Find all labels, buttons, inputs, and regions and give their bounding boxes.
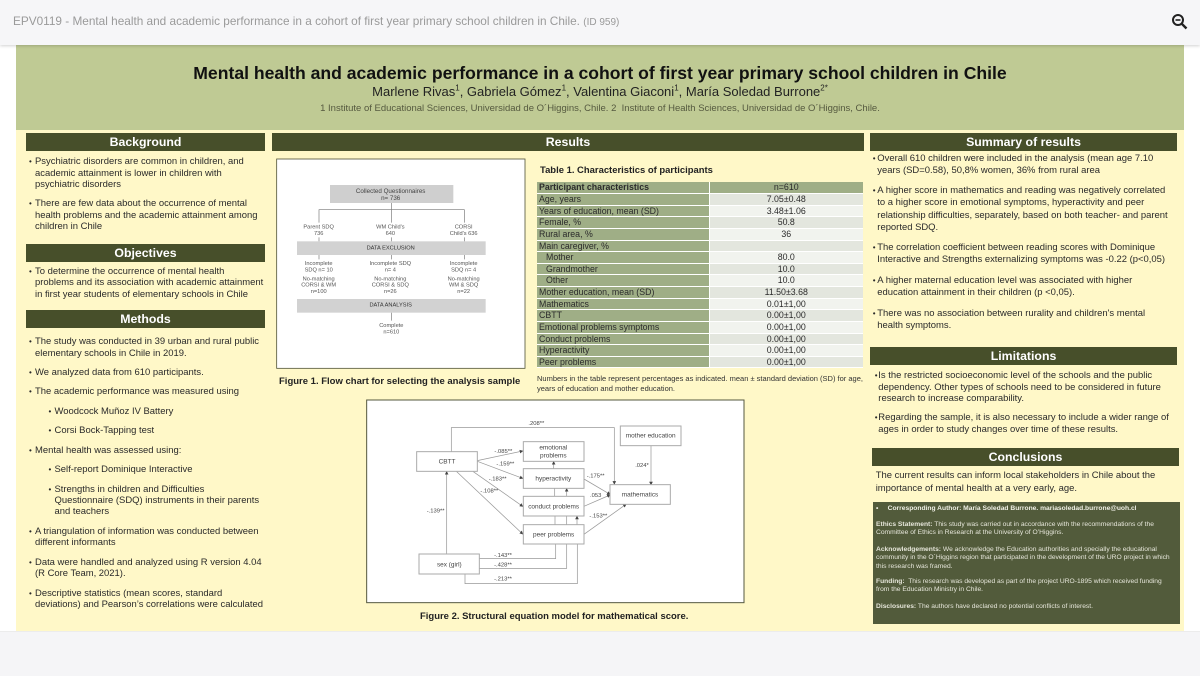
ethics statement: Committee of Ethics in Research at the University of O’Higgins.	[876, 529, 1063, 536]
text: statistics: Descriptive statistics (mean scores, standard	[35, 588, 222, 599]
table 1: participant characteristics: CBTT	[539, 310, 562, 320]
funding	[876, 578, 1162, 593]
figure 2: structural equation model: -.139**	[427, 509, 445, 515]
text: summary 2: reported SDQ.	[877, 222, 938, 233]
figure 2: structural equation model: mother education	[626, 433, 676, 440]
ethics statement	[876, 521, 1154, 536]
figure 1: flow chart: Child's 636	[450, 231, 478, 237]
text: SDQ	[54, 484, 259, 518]
table 1: participant characteristics: 11.50±3.68	[765, 287, 808, 297]
table 1: participant characteristics: n=610	[774, 182, 799, 192]
text: background bullet 1	[35, 156, 244, 191]
table note: years of education and mother education.	[537, 384, 675, 393]
text: objectives: problems and its association with academic attainment	[35, 277, 263, 288]
figure 1: flow chart: No-matching	[448, 276, 480, 282]
figure 1: flow chart: n=610	[383, 329, 399, 335]
text: conclusions: importance of mental health at a very early, age.	[876, 482, 1077, 494]
text: R software: (R Core Team, 2021).	[35, 568, 126, 579]
table 1: participant characteristics: Hyperactivity	[539, 345, 589, 355]
text: limitation 1: dependency. Other types of schools need to be considered in future	[878, 382, 1161, 393]
acknowledgements	[876, 546, 1170, 570]
text: triangulation: different informants	[35, 537, 116, 548]
text: statistics	[35, 588, 263, 610]
funding: from the Education Ministry in Chile.	[876, 586, 983, 593]
table 1: participant characteristics: Main caregiver, %	[539, 241, 609, 251]
heading: background	[26, 133, 265, 151]
text: summary 4: A higher maternal education level was associated with higher	[877, 275, 1132, 286]
figure 1: flow chart: 736	[314, 231, 323, 237]
text: study: The study was conducted in 39 urban and rural public	[35, 336, 259, 347]
funding: Funding: This research was developed as part of the project URO-1895 which received funding	[876, 578, 1162, 585]
ethics statement: Ethics Statement: This study was carried out in accordance with the recommendations of the	[876, 521, 1154, 528]
acknowledgements: Acknowledgements: We acknowledge the Education authorities and specially the educational	[876, 546, 1157, 553]
figure 1: flow chart: n=22	[457, 289, 470, 295]
figure 2: structural equation model	[366, 400, 744, 604]
text: summary 2	[877, 185, 1168, 234]
figure 1: flow chart: DATA EXCLUSION	[367, 246, 415, 252]
table 1: participant characteristics: 50.8	[778, 217, 795, 227]
table 1: participant characteristics: 0.00±1,00	[767, 310, 806, 320]
figure 1: flow chart: CORSI & WM	[301, 283, 336, 289]
poster header banner	[16, 45, 1184, 130]
text: triangulation: A triangulation of information was conducted between	[35, 526, 258, 537]
heading: objectives: Objectives	[114, 246, 177, 260]
figure 2: structural equation model: -.175**	[587, 474, 605, 480]
figure 1: flow chart: CORSI	[455, 224, 473, 230]
table 1: participant characteristics: 3.48±1.06	[767, 206, 806, 216]
acknowledgements: this research was framed.	[876, 563, 953, 570]
text: summary 1: years (SD=0.58), 50,8% women, 36% from rural area	[877, 165, 1100, 176]
text: background bullet 1: Psychiatric disorders are common in children, and	[35, 156, 244, 167]
poster reference title: EPV0119 - Mental health and academic performance in a cohort of first year primary school children in Chile. (ID 959)	[13, 14, 619, 28]
figure 1: flow chart: CORSI & SDQ	[372, 283, 409, 289]
text: SDQ: Strengths in children and Difficulties	[54, 484, 204, 495]
text: limitation 1: research to increase comparability.	[878, 393, 1024, 404]
text: background bullet 2: There are few data about the occurrence of mental	[35, 198, 247, 209]
figure 1: flow chart: Incomplete	[305, 261, 333, 267]
figure 2: structural equation model: -.213**	[494, 577, 513, 583]
table 1: participant characteristics: Mother education, mean (SD)	[539, 287, 654, 297]
text: objectives	[35, 266, 263, 300]
figure 2: structural equation model: peer problems	[533, 532, 574, 539]
figure 1: flow chart: No-matching	[303, 276, 335, 282]
table 1: participant characteristics: 36	[781, 229, 791, 239]
heading: limitations	[870, 347, 1177, 365]
table 1: participant characteristics: Participant characteristics	[539, 182, 649, 192]
text: background bullet 2	[35, 198, 257, 233]
table 1: participant characteristics: Rural area, %	[539, 229, 593, 239]
figure 2: structural equation model: hyperactivity	[535, 476, 572, 483]
heading: conclusions	[872, 448, 1179, 466]
table 1: participant characteristics: 80.0	[778, 252, 795, 262]
table 1: participant characteristics: Conduct problems	[539, 334, 610, 344]
heading: background: Background	[110, 135, 181, 149]
heading: summary of results: Summary of results	[966, 135, 1081, 149]
table 1: participant characteristics: Female, %	[539, 217, 581, 227]
figure 2: structural equation model: -.159**	[496, 461, 515, 467]
figure 1: flow chart: SDQ n= 4	[451, 268, 476, 274]
table 1: participant characteristics: 0.01±1,00	[767, 299, 806, 309]
acknowledgements: community in the O´Higgins region that participated in the development of the URO project in which	[876, 554, 1170, 561]
text: summary 5	[877, 308, 1145, 332]
text: objectives: in first year students of elementary schools in Chile	[35, 289, 248, 300]
figure 2: structural equation model: -.183**	[489, 476, 507, 482]
table 1: participant characteristics: Age, years	[539, 194, 581, 204]
text: R software	[35, 557, 262, 579]
text: study: elementary schools in Chile in 2019.	[35, 348, 187, 359]
text: summary 5: health symptoms.	[877, 320, 951, 331]
text: summary 2: to a higher score in emotional symptoms, hyperactivity and peer	[877, 197, 1144, 208]
heading: objectives	[26, 244, 265, 262]
text: background bullet 2: health problems and the academic attainment among	[35, 210, 257, 221]
text: statistics: deviations) and Pearson’s correlations were calculated	[35, 599, 263, 610]
figure 1: flow chart: Incomplete	[450, 261, 478, 267]
panel: left column	[26, 133, 265, 610]
corresponding author: • Corresponding Author: María Soledad Burrone. mariasoledad.burrone@uoh.cl	[876, 505, 1137, 512]
figure 1: flow chart: Collected Questionnaires	[356, 188, 425, 195]
text: limitation 1: Is the restricted socioeconomic level of the schools and the public	[878, 370, 1152, 381]
table 1: participant characteristics: Mathematics	[539, 299, 589, 309]
heading: summary of results	[870, 133, 1177, 151]
figure 2: structural equation model: mathematics	[622, 492, 658, 499]
text: self-report: Self-report Dominique Interactive	[54, 464, 192, 475]
disclosures: Disclosures: The authors have declared no potential conflicts of interest.	[876, 603, 1093, 610]
text: objectives: To determine the occurrence of mental health	[35, 266, 224, 277]
text: summary 4	[877, 275, 1132, 299]
text: mental health: Mental health was assessed using:	[35, 445, 181, 456]
figure 1: flow chart: Complete	[379, 323, 403, 329]
text: summary 4: education attainment in their children (p <0,05).	[877, 287, 1075, 298]
table 1: participant characteristics: 0.00±1,00	[767, 345, 806, 355]
table 1: participant characteristics: Years of education, mean (SD)	[539, 206, 659, 216]
panel: disclosures	[873, 502, 1180, 624]
figure 2: structural equation model: emotional	[539, 444, 567, 451]
figure 1: flow chart	[276, 158, 526, 369]
top bar	[0, 0, 1200, 45]
figure 1: flow chart: n= 4	[385, 268, 396, 274]
text: background bullet 1: academic attainment is lower in children with	[35, 168, 222, 179]
table 1: participant characteristics	[537, 182, 863, 368]
figure 1: flow chart: No-matching	[374, 276, 406, 282]
bottom bar	[0, 631, 1200, 676]
panel: right column	[870, 133, 1180, 624]
figure 2: structural equation model: conduct problems	[528, 503, 579, 510]
table note	[537, 374, 863, 393]
table 1: participant characteristics: Emotional problems symptoms	[539, 322, 659, 332]
figure 1: flow chart: DATA ANALYSIS	[369, 303, 412, 309]
text: summary 2: A higher score in mathematics and reading was negatively correlated	[877, 185, 1165, 196]
text: R software: Data were handled and analyzed using R version 4.04	[35, 557, 262, 568]
text: study	[35, 336, 259, 359]
figure 2: structural equation model: -.153**	[589, 514, 608, 520]
heading: methods	[26, 310, 265, 328]
table 1: participant characteristics: Mother	[546, 252, 573, 262]
text: summary 3: Interactive and Strengths externalizing symptoms was -0.22 (p<0,05)	[877, 254, 1165, 265]
heading: methods: Methods	[120, 312, 171, 326]
text: summary 1	[877, 153, 1153, 177]
affiliations: 1 Institute of Educational Sciences, Universidad de O´Higgins, Chile. 2 Institute of Health Sciences, Universidad de O´Higgins, Chile.	[320, 103, 880, 114]
figure 2 caption: Figure 2. Structural equation model for mathematical score.	[420, 611, 688, 622]
figure 2: structural equation model: .208**	[528, 421, 545, 427]
figure 2: structural equation model: .024*	[635, 463, 650, 469]
figure 1: flow chart: n=26	[384, 289, 397, 295]
table 1: participant characteristics: 7.05±0.48	[767, 194, 806, 204]
text: summary 3	[877, 242, 1165, 267]
heading: results	[272, 133, 864, 151]
heading: limitations: Limitations	[991, 349, 1056, 363]
figure 1: flow chart: Incomplete SDQ	[370, 261, 412, 267]
figure 1: flow chart: 640	[386, 231, 395, 237]
text: limitation 2: Regarding the sample, it is also necessary to include a wider range of	[878, 412, 1169, 423]
figure 1: flow chart: WM & SDQ	[449, 283, 479, 289]
figure 1: flow chart: n=100	[311, 289, 327, 295]
table 1: participant characteristics: 0.00±1,00	[767, 334, 806, 344]
text: data: We analyzed data from 610 participants.	[35, 367, 204, 378]
text: background bullet 1: psychiatric disorders	[35, 179, 121, 190]
figure 2: structural equation model: CBTT	[439, 458, 455, 465]
text: summary 3: The correlation coefficient between reading scores with Dominique	[877, 242, 1155, 253]
table 1: participant characteristics: 0.00±1,00	[767, 322, 806, 332]
table 1: participant characteristics: Peer problems	[539, 357, 596, 367]
text: SDQ: and teachers	[54, 506, 109, 517]
text: summary 1: Overall 610 children were included in the analysis (mean age 7.10	[877, 153, 1153, 164]
text: academic performance: The academic performance was measured using	[35, 386, 239, 397]
authors: Marlene Rivas1, Gabriela Gómez1, Valentina Giaconi1, María Soledad Burrone2*	[372, 84, 828, 99]
text: background bullet 2: children in Chile	[35, 221, 102, 232]
table 1: participant characteristics: 0.00±1,00	[767, 357, 806, 367]
text: Woodcock: Woodcock Muñoz IV Battery	[54, 406, 173, 417]
text: conclusions: The current results can inform local stakeholders in Chile about the	[876, 470, 1155, 480]
text: Corsi: Corsi Bock-Tapping test	[54, 425, 154, 436]
text: conclusions	[876, 470, 1155, 494]
text: summary 2: relationship difficulties, separately, based on both teacher- and parent	[877, 210, 1168, 221]
figure 2: structural equation model: problems	[540, 453, 567, 460]
text: limitation 2: ages in order to study changes over time of these results.	[878, 424, 1118, 435]
heading: results: Results	[546, 135, 590, 149]
figure 1: flow chart: n= 736	[381, 195, 401, 202]
table title: Table 1. Characteristics of participants	[540, 165, 713, 176]
table 1: participant characteristics: Other	[546, 275, 568, 285]
table note: Numbers in the table represent percentages as indicated. mean ± standard deviation (SD) for age,	[537, 374, 863, 383]
figure 2: structural equation model: -.085**	[494, 449, 513, 455]
poster title: Mental health and academic performance in a cohort of first year primary school children in Chile	[193, 63, 1007, 83]
text: SDQ: Questionnaire (SDQ) instruments in their parents	[54, 495, 259, 506]
heading: conclusions: Conclusions	[989, 450, 1062, 464]
text: limitation 2	[878, 412, 1169, 435]
figure 1: flow chart: Parent SDQ	[303, 224, 335, 230]
figure 2: structural equation model: -.143**	[494, 553, 513, 559]
table 1: participant characteristics: Grandmother	[546, 264, 598, 274]
figure 2: structural equation model: -.428**	[494, 563, 513, 569]
text: triangulation	[35, 526, 258, 549]
figure 2: structural equation model: -.108**	[480, 489, 499, 495]
icon: zoom out magnifier	[1172, 14, 1188, 30]
table 1: participant characteristics: 10.0	[778, 264, 795, 274]
text: limitation 1	[878, 370, 1161, 405]
figure 2: structural equation model: .053	[590, 493, 601, 499]
table 1: participant characteristics: 10.0	[778, 275, 795, 285]
figure 1: flow chart: SDQ n= 10	[305, 268, 333, 274]
text: summary 5: There was no association between rurality and children's mental	[877, 308, 1145, 319]
figure 1: flow chart: WM Child's	[376, 224, 405, 230]
figure 2: structural equation model: sex (girl)	[437, 561, 462, 568]
figure 1 caption: Figure 1. Flow chart for selecting the analysis sample	[279, 376, 520, 387]
